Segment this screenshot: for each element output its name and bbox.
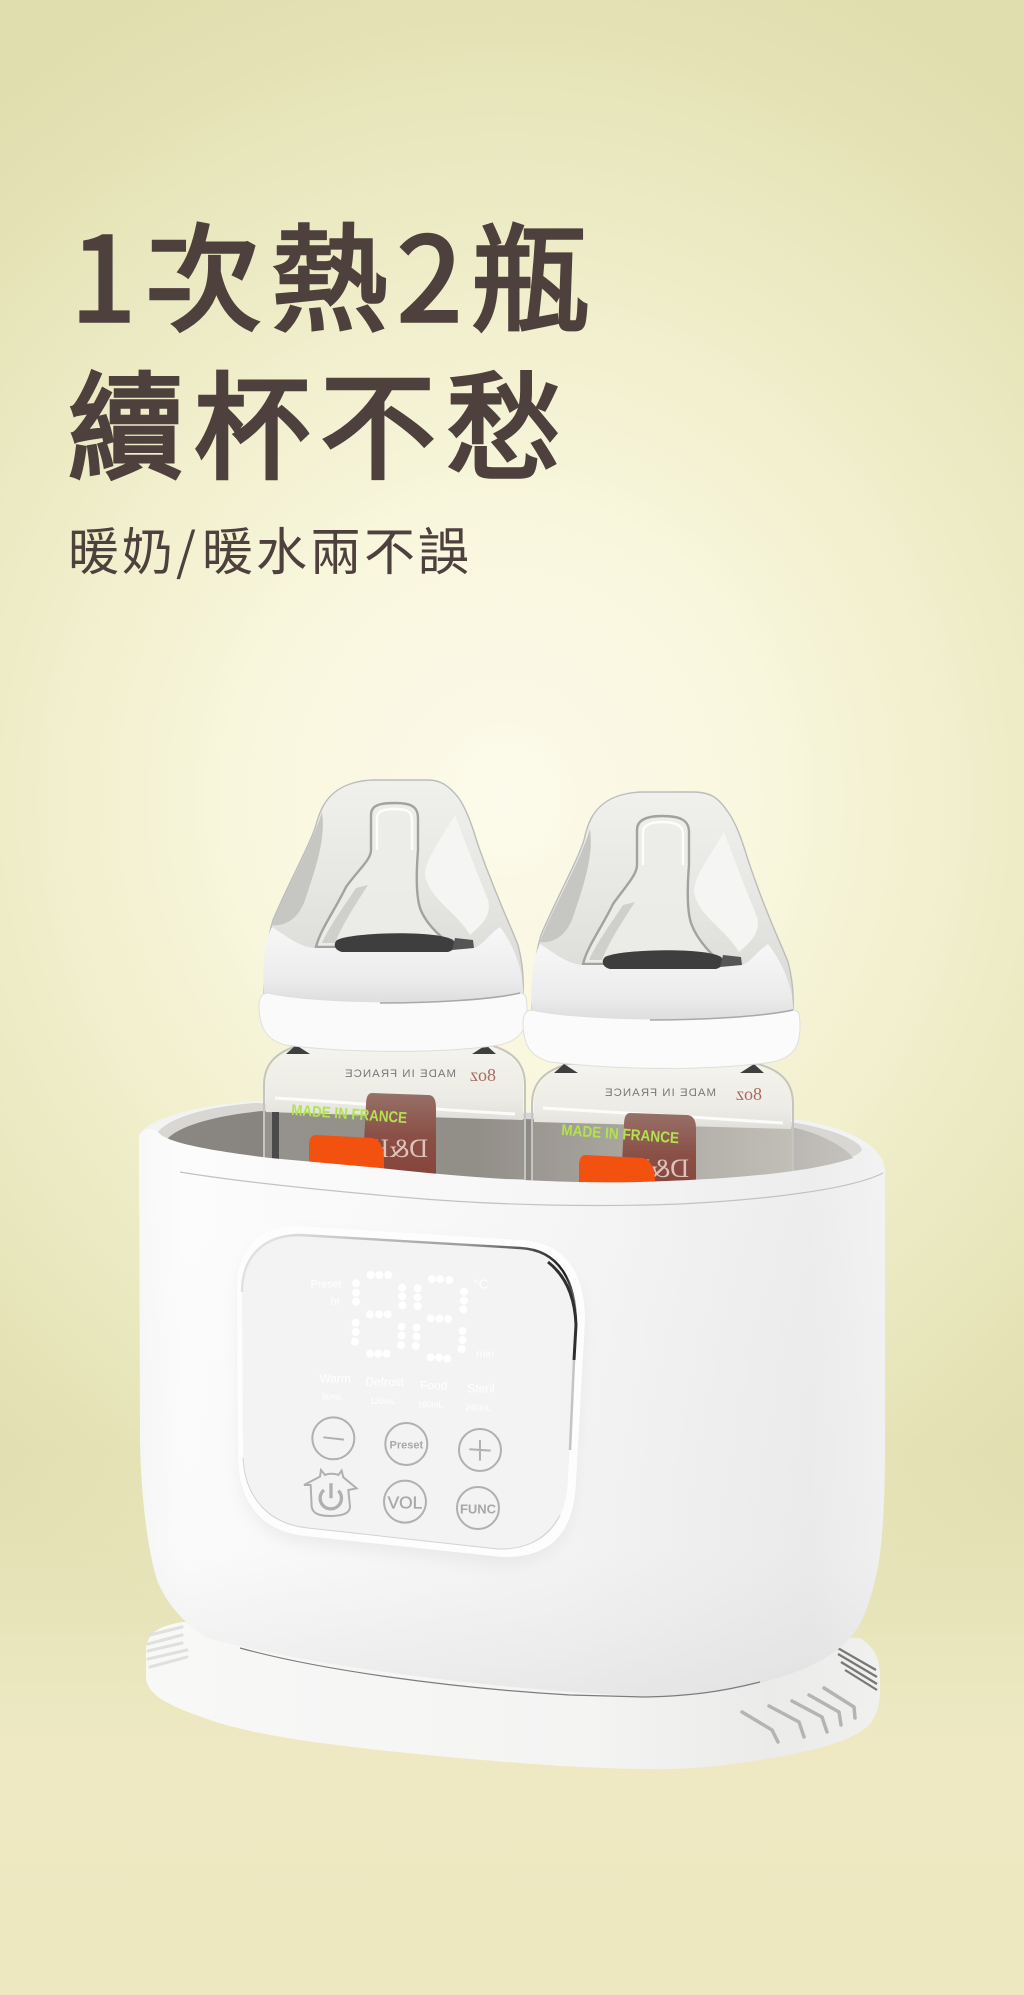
display labels: Preset xyxy=(311,1278,341,1290)
display labels: Steril xyxy=(467,1382,495,1396)
control panel xyxy=(237,1226,585,1565)
vents right xyxy=(742,1688,855,1742)
subtitle: 暖奶/暖水兩不誤 xyxy=(68,511,472,585)
brown label xyxy=(620,1113,696,1199)
green label: MADE IN FRANCE xyxy=(561,1122,680,1147)
dark teat ring xyxy=(335,933,455,952)
left bottle xyxy=(259,780,527,1180)
vents left xyxy=(148,1627,187,1667)
title: 1次熱2瓶 xyxy=(71,187,598,355)
green label: MADE IN FRANCE xyxy=(291,1102,408,1127)
plus button xyxy=(459,1429,501,1471)
touch buttons xyxy=(304,1417,501,1529)
func button xyxy=(457,1487,499,1529)
preset button: Preset xyxy=(390,1440,423,1452)
mirrored print: MADE IN FRANCE xyxy=(344,1068,456,1080)
base plate xyxy=(146,1622,880,1769)
display labels: °C xyxy=(473,1276,489,1291)
dark teat ring xyxy=(603,950,723,969)
display labels: 180mL xyxy=(418,1399,443,1409)
white ring xyxy=(531,944,793,1019)
collar xyxy=(523,1010,800,1068)
mirrored print: MADE IN FRANCE xyxy=(604,1087,716,1099)
brown label xyxy=(362,1093,436,1180)
power icon xyxy=(304,1470,357,1516)
minus button xyxy=(312,1417,354,1459)
display labels: 240mL xyxy=(466,1403,491,1413)
title xyxy=(68,187,598,503)
contact shadow xyxy=(240,1648,760,1697)
display labels xyxy=(311,1276,495,1413)
display labels: 90mL xyxy=(322,1391,343,1401)
orange tag xyxy=(579,1155,655,1199)
glass body xyxy=(266,1047,523,1120)
orange tag xyxy=(309,1135,384,1180)
display labels: Food xyxy=(420,1378,447,1392)
preset button xyxy=(385,1423,427,1465)
display labels: min xyxy=(476,1349,494,1361)
mirrored logo: D&H xyxy=(370,1134,428,1163)
nipple xyxy=(316,803,457,947)
nipple xyxy=(583,816,726,964)
left bottle: 8oz xyxy=(470,1065,496,1085)
right bottle: 8oz xyxy=(736,1084,762,1104)
title: 續杯不愁 xyxy=(68,335,572,503)
display labels: Defrost xyxy=(365,1375,405,1389)
func button: FUNC xyxy=(460,1501,497,1516)
cap xyxy=(532,792,793,1010)
display labels: Warm xyxy=(319,1371,351,1385)
vol button xyxy=(384,1481,426,1523)
warmer back rim and interior xyxy=(139,1101,885,1210)
warmer front body xyxy=(139,1129,885,1697)
mirrored logo: D&H xyxy=(631,1154,689,1183)
display labels: hr xyxy=(331,1296,341,1308)
product: bottle warmer xyxy=(139,780,885,1769)
right bottle xyxy=(523,792,800,1199)
collar xyxy=(259,993,527,1051)
display dots xyxy=(351,1271,468,1363)
white ring xyxy=(263,927,523,1002)
vol button: VOL xyxy=(388,1493,423,1513)
chrome edge xyxy=(242,1235,576,1549)
seam line xyxy=(180,1172,883,1206)
vents upper right xyxy=(836,1647,877,1690)
cap xyxy=(264,780,523,993)
display labels: 120mL xyxy=(370,1396,396,1406)
